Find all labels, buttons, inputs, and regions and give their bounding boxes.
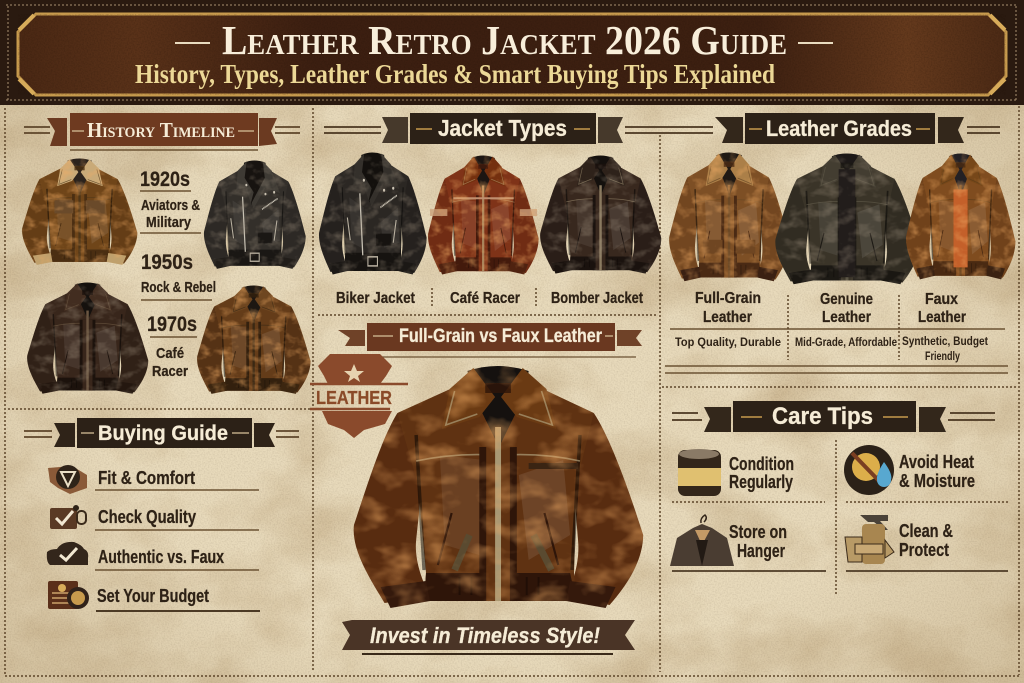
jacket: biker (319, 153, 427, 274)
panel: leather grades (665, 113, 1015, 373)
heading: jacket types (324, 113, 713, 144)
tip: avoid heat and moisture: & Moisture (899, 471, 975, 491)
heading: leather grades (715, 113, 1000, 144)
tip: store on hanger: Store on (729, 522, 787, 542)
banner: invest in timeless style (342, 620, 635, 654)
labels: leather grades: Genuine (820, 291, 873, 308)
jacket: cafe racer (428, 155, 539, 275)
labels: leather grades: Leather (918, 309, 966, 326)
labels: leather grades: Leather (703, 309, 752, 326)
jacket: main brown leather (354, 366, 643, 608)
tip: clean and protect: Protect (899, 540, 949, 560)
tip: store on hanger (670, 515, 826, 571)
item: check quality (50, 505, 259, 530)
jacket: 1970s dark (27, 282, 148, 394)
item: set your budget (48, 581, 260, 611)
banner: invest in timeless style: Invest in Timeless Style! (370, 623, 600, 648)
panel: full-grain vs faux leather (310, 323, 643, 654)
timeline text: 1950s (140, 233, 216, 300)
tip: avoid heat and moisture (844, 445, 1008, 502)
timeline text: 1970s: Racer (152, 363, 188, 380)
jacket: 1950s biker (204, 160, 306, 269)
jacket: faux (906, 154, 1015, 279)
tip: condition regularly: Condition (729, 454, 794, 474)
panel: buying guide (24, 418, 299, 611)
labels: jacket types: Café Racer (450, 290, 520, 307)
tip: condition regularly (672, 449, 825, 502)
tip: store on hanger: Hanger (737, 541, 785, 561)
jacket: 1970s cafe (197, 285, 311, 394)
labels: leather grades: Full-Grain (695, 290, 761, 307)
labels: leather grades: Faux (925, 291, 958, 308)
jacket: 1920s aviator (22, 158, 137, 265)
heading: history timeline: History Timeline (87, 118, 235, 142)
timeline text: 1920s: Military (146, 214, 192, 231)
heading: buying guide (24, 418, 299, 448)
item: fit and comfort: Fit & Comfort (98, 468, 195, 488)
jacket: bomber (540, 155, 661, 274)
title: Leather Retro Jacket 2026 Guide (222, 17, 787, 63)
jacket: genuine (775, 154, 919, 284)
labels: jacket types: Biker Jacket (336, 290, 416, 307)
timeline text: 1970s: 1970s (147, 313, 197, 336)
tip: avoid heat and moisture: Avoid Heat (899, 452, 974, 472)
heading: care tips (672, 401, 995, 432)
jacket: full-grain (669, 153, 789, 281)
heading: full-grain vs faux leather: Full-Grain vs Faux Leather (399, 326, 603, 347)
item: authentic vs faux: Authentic vs. Faux (98, 547, 224, 567)
timeline text: 1970s (147, 313, 197, 380)
labels: leather grades: Mid-Grade, Affordable (795, 335, 897, 349)
timeline text: 1920s (140, 168, 200, 231)
item: fit and comfort (48, 465, 259, 494)
labels: jacket types (336, 288, 644, 307)
item: authentic vs faux (47, 542, 259, 570)
timeline text: 1950s: Rock & Rebel (141, 279, 216, 296)
panel: jacket types (319, 113, 713, 307)
labels: leather grades: Friendly (925, 349, 960, 363)
labels: jacket types: Bomber Jacket (551, 290, 644, 307)
panel: history timeline (22, 113, 311, 394)
timeline text: 1970s: Café (156, 345, 184, 362)
panel: care tips (670, 401, 1008, 595)
labels: leather grades: Synthetic, Budget (902, 334, 988, 348)
heading: history timeline (24, 113, 300, 150)
timeline text: 1920s: Aviators & (141, 197, 200, 214)
heading: leather grades: Leather Grades (766, 116, 912, 141)
labels: leather grades: Top Quality, Durable (675, 335, 781, 349)
heading: buying guide: Buying Guide (98, 422, 228, 445)
subtitle: History, Types, Leather Grades & Smart Buying Tips Explained (135, 59, 775, 89)
tip: clean and protect: Clean & (899, 521, 953, 541)
badge: leather: LEATHER (316, 388, 392, 408)
item: check quality: Check Quality (98, 507, 196, 527)
heading: jacket types: Jacket Types (438, 115, 567, 141)
tip: clean and protect (845, 515, 1008, 571)
tip: condition regularly: Regularly (729, 472, 793, 492)
heading: full-grain vs faux leather (338, 323, 642, 357)
header band (0, 0, 1024, 105)
item: set your budget: Set Your Budget (97, 586, 209, 606)
timeline text: 1920s: 1920s (140, 168, 190, 191)
labels: leather grades (665, 290, 1008, 373)
labels: leather grades: Leather (822, 309, 871, 326)
badge: leather (310, 354, 408, 438)
heading: care tips: Care Tips (772, 403, 873, 430)
timeline text: 1950s: 1950s (141, 251, 193, 274)
